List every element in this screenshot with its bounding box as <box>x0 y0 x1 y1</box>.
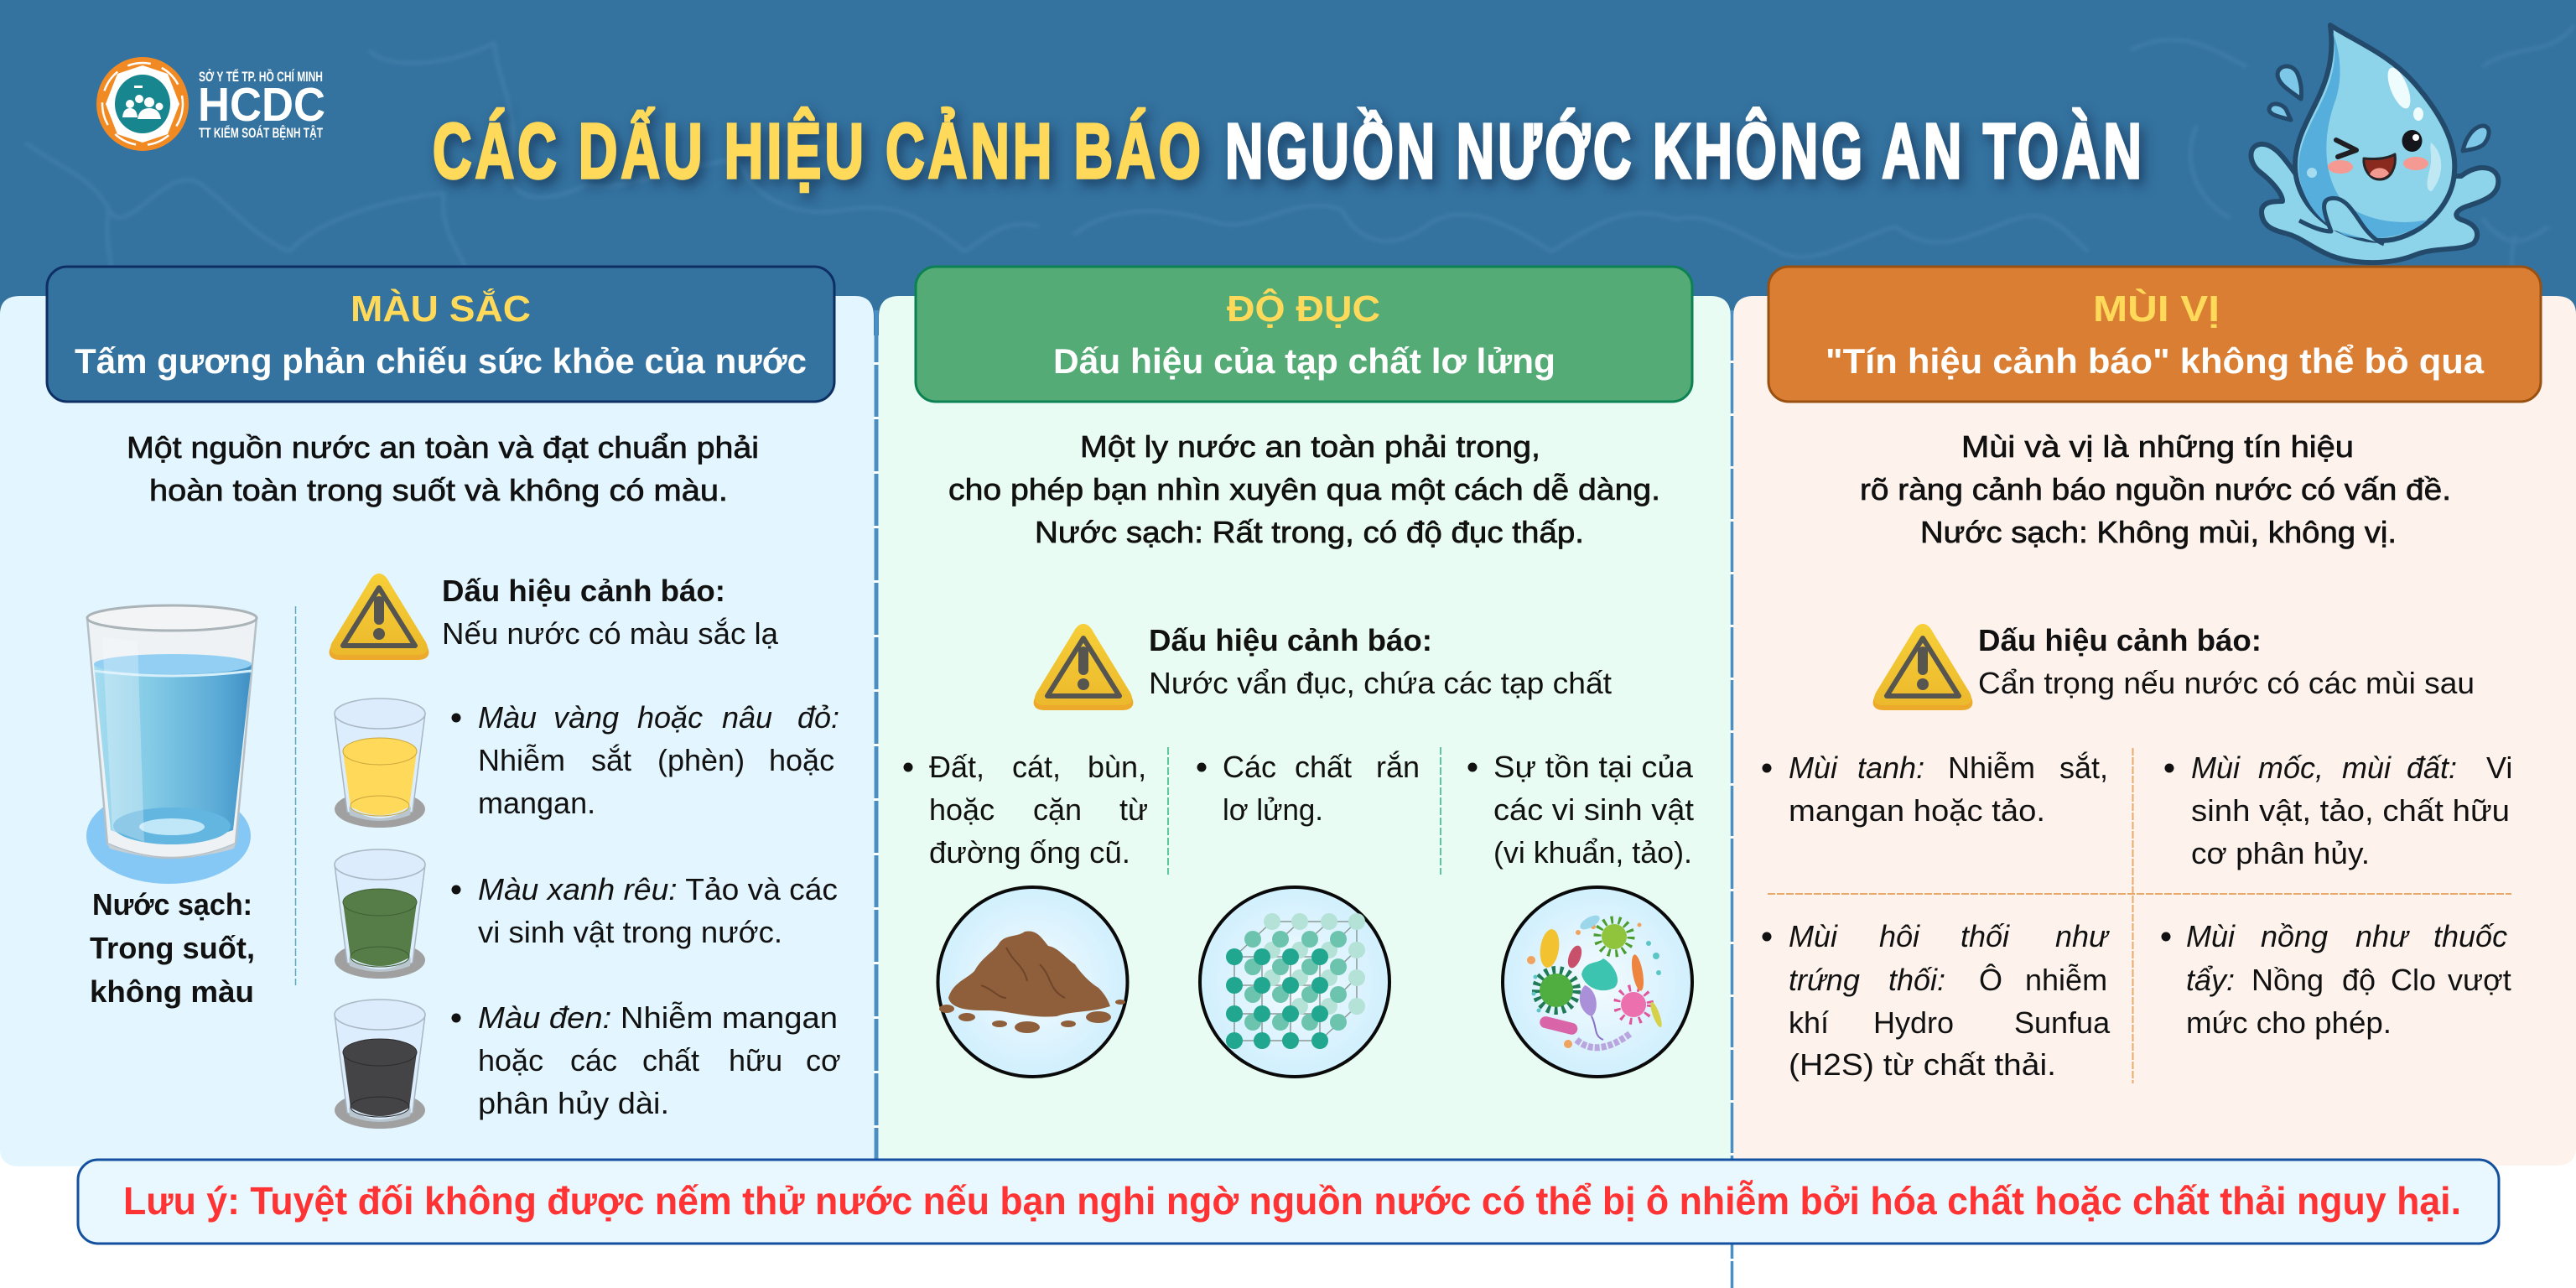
warning text <box>1149 623 1612 700</box>
heading: mùi vị: "Tín hiệu cảnh báo" không thể bỏ qua <box>1826 341 2485 381</box>
intro text <box>948 429 1660 549</box>
heading: mùi vị: MÙI VỊ <box>2093 288 2220 330</box>
bullet: rotten egg smell: như <box>2055 919 2110 953</box>
bullet: black: các <box>570 1043 617 1078</box>
bullet: yellow: (phèn) <box>657 743 745 777</box>
logo: HCDC: HCDC <box>198 78 325 132</box>
bullet: chlorine smell: tẩy: <box>2186 963 2235 997</box>
bullet: microorganisms <box>1467 750 1694 870</box>
icon: black water glass <box>335 1000 425 1129</box>
bullet: rotten egg smell: Hydro <box>1873 1005 1954 1040</box>
bullet: microorganisms: (vi khuẩn, tảo). <box>1493 835 1692 870</box>
bullet: yellow: đỏ: <box>797 700 839 735</box>
bullet: soil: Đất, <box>929 750 984 784</box>
bullet: musty smell: mùi <box>2342 750 2392 785</box>
caption: clean water: không màu <box>90 974 254 1009</box>
bullet: yellow: Nhiễm <box>478 743 565 777</box>
bullet: chlorine smell: thuốc <box>2433 919 2507 953</box>
bullet: black: cơ <box>806 1043 841 1078</box>
bullet: chlorine smell: vượt <box>2448 963 2511 997</box>
heading: mùi vị <box>1768 267 2541 402</box>
warning text: Dấu hiệu cảnh báo: <box>442 574 725 608</box>
heading: độ đục: Dấu hiệu của tạp chất lơ lửng <box>1053 341 1555 381</box>
highlights <box>2383 65 2415 112</box>
bullet: green <box>451 872 838 949</box>
intro text: cho phép bạn nhìn xuyên qua một cách dễ dàng. <box>948 472 1660 506</box>
icon: particle lattice <box>1200 887 1389 1077</box>
bullet: fishy smell: Mùi <box>1789 750 1838 785</box>
bullet: rotten egg smell: trứng <box>1789 963 1860 997</box>
icon: microorganisms <box>1503 887 1692 1077</box>
bullet: yellow: mangan. <box>478 786 595 820</box>
bullet: fishy smell: mangan hoặc tảo. <box>1789 793 2045 828</box>
divider: blue dashed lines <box>876 310 1732 1288</box>
bullet: black: hữu <box>729 1043 782 1078</box>
bullet: rotten egg smell: Mùi <box>1789 919 1838 953</box>
logo: HCDC: SỞ Y TẾ TP. HỒ CHÍ MINH <box>199 69 323 85</box>
intro text: hoàn toàn trong suốt và không có màu. <box>149 473 728 507</box>
bullet: yellow: hoặc <box>637 700 703 735</box>
bullet: musty smell: cơ phân hủy. <box>2191 836 2370 870</box>
bullet: suspended solids: chất <box>1295 750 1352 784</box>
bullet: soil <box>904 750 1148 870</box>
icon: yellow water glass <box>335 699 425 828</box>
bullet: musty smell <box>2165 750 2512 870</box>
bullet: rotten egg smell: (H2S) từ chất thải. <box>1789 1047 2056 1082</box>
heading: màu sắc: MÀU SẮC <box>351 288 531 330</box>
body <box>2295 25 2454 241</box>
bullet: musty smell: mốc, <box>2258 750 2324 785</box>
title: CÁC DẤU HIỆU CẢNH BÁO <box>433 107 1204 195</box>
bullet: soil: từ <box>1119 792 1148 827</box>
bullet: suspended solids: rắn <box>1376 750 1420 784</box>
bullet: yellow: Màu <box>478 700 537 735</box>
intro text: rõ ràng cảnh báo nguồn nước có vấn đề. <box>1860 472 2451 506</box>
bullet: soil: hoặc <box>929 792 995 827</box>
bullet: soil: đường ống cũ. <box>929 835 1130 870</box>
bullet: suspended solids <box>1197 750 1420 827</box>
panel: độ đục <box>904 267 1694 1077</box>
bullet: suspended solids: lơ lửng. <box>1223 792 1323 827</box>
bullet: chlorine smell: mức cho phép. <box>2186 1005 2392 1040</box>
bullet: yellow: hoặc <box>769 743 834 777</box>
heading: màu sắc <box>47 267 834 402</box>
bullet: fishy smell: sắt, <box>2059 750 2108 785</box>
bullet: black: Màu đen: Nhiễm mangan <box>478 1000 838 1035</box>
bullet: suspended solids: Các <box>1223 750 1276 784</box>
icon: warning <box>1873 624 1972 710</box>
wave <box>2299 198 2384 244</box>
warning text <box>442 574 779 651</box>
bullet: fishy smell: tanh: <box>1857 750 1924 785</box>
bullet: chlorine smell: nồng <box>2261 919 2328 953</box>
panel: màu sắc <box>47 267 841 1129</box>
warning text: Cẩn trọng nếu nước có các mùi sau <box>1978 666 2475 700</box>
logo: HCDC: TT KIỂM SOÁT BỆNH TẬT <box>199 125 323 141</box>
bullet: yellow: sắt <box>591 743 631 777</box>
bullet: chlorine smell: độ <box>2342 963 2376 997</box>
bullet: rotten egg smell: Sunfua <box>2014 1005 2111 1040</box>
illustration: clean water glass <box>86 605 257 884</box>
face <box>2336 140 2356 157</box>
bullet: green: Màu xanh rêu: Tảo và các <box>478 872 838 906</box>
bullet: musty smell: Vi <box>2486 750 2512 785</box>
bullet: rotten egg smell: thối: <box>1888 963 1945 997</box>
mascot: water droplet <box>2251 25 2498 262</box>
bullet: chlorine smell: Nồng <box>2251 963 2324 997</box>
logo: HCDC <box>96 57 325 151</box>
warning text <box>1978 623 2475 700</box>
bullet: rotten egg smell: khí <box>1789 1005 1829 1040</box>
callout: warning note <box>78 1160 2499 1244</box>
bullet: fishy smell <box>1763 750 2108 828</box>
panel: độ đục background <box>879 296 1731 1166</box>
bullet: chlorine smell: Mùi <box>2186 919 2236 953</box>
bullet: musty smell: sinh vật, tảo, chất hữu <box>2191 793 2510 828</box>
heading: độ đục: ĐỘ ĐỤC <box>1227 287 1380 330</box>
warning text: Dấu hiệu cảnh báo: <box>1978 623 2262 657</box>
bullet: musty smell: Mùi <box>2191 750 2241 785</box>
bullet: fishy smell: Nhiễm <box>1948 750 2035 785</box>
icon: green water glass <box>335 849 425 979</box>
warning text: Dấu hiệu cảnh báo: <box>1149 623 1432 657</box>
bullet: green: vi sinh vật trong nước. <box>478 915 782 949</box>
bullet: chlorine smell <box>2162 919 2511 1040</box>
bullet: rotten egg smell: thối <box>1961 919 2010 953</box>
bullet: rotten egg smell: hôi <box>1879 919 1920 953</box>
intro text <box>127 430 759 507</box>
splash <box>2251 144 2498 262</box>
bullet: yellow <box>451 700 839 820</box>
intro text <box>1860 429 2451 549</box>
bullet: chlorine smell: Clo <box>2391 963 2436 997</box>
intro text: Nước sạch: Rất trong, có độ đục thấp. <box>1035 515 1584 549</box>
bullet: rotten egg smell: Ô <box>1979 963 2002 997</box>
callout: warning note: Lưu ý: Tuyệt đối không được nếm thử nước nếu bạn nghi ngờ nguồn nước có thể bị ô nhiễm bởi hóa chất hoặc chất thải nguy hại. <box>123 1179 2461 1223</box>
bullet: microorganisms: các vi sinh vật <box>1493 792 1694 827</box>
small drops <box>2277 66 2302 99</box>
warning text: Nếu nước có màu sắc lạ <box>442 616 779 651</box>
caption: clean water: Nước sạch: <box>92 887 252 922</box>
bullet: musty smell: đất: <box>2407 750 2457 785</box>
intro text: Nước sạch: Không mùi, không vị. <box>1920 515 2397 549</box>
header background <box>0 0 2576 335</box>
panel: màu sắc background <box>0 296 874 1166</box>
bullet: soil: cặn <box>1033 792 1082 827</box>
bullet: microorganisms: Sự tồn tại của <box>1493 750 1694 784</box>
panel: mùi vị background <box>1733 296 2576 1166</box>
bullet: rotten egg smell <box>1763 919 2111 1082</box>
caption: clean water <box>90 887 255 1009</box>
bullet: rotten egg smell: nhiễm <box>2025 963 2107 997</box>
bullet: yellow: nâu <box>722 700 772 735</box>
bullet: black: chất <box>642 1043 699 1078</box>
bullet: soil: bùn, <box>1088 750 1146 784</box>
intro text: Một nguồn nước an toàn và đạt chuẩn phải <box>127 430 759 465</box>
heading: độ đục <box>916 267 1692 402</box>
bullet: chlorine smell: như <box>2355 919 2410 953</box>
intro text: Một ly nước an toàn phải trong, <box>1080 429 1540 464</box>
icon: soil pile <box>937 887 1127 1077</box>
title <box>433 107 2145 195</box>
warning text: Nước vẩn đục, chứa các tạp chất <box>1149 666 1612 700</box>
caption: clean water: Trong suốt, <box>90 931 255 965</box>
bullet: soil: cát, <box>1012 750 1061 784</box>
bullet: black: hoặc <box>478 1043 543 1078</box>
bullet: black <box>451 1000 841 1120</box>
icon: warning <box>1034 624 1133 710</box>
title: NGUỒN NƯỚC KHÔNG AN TOÀN <box>1225 107 2145 195</box>
panel: mùi vị <box>1763 267 2541 1083</box>
heading: màu sắc: Tấm gương phản chiếu sức khỏe của nước <box>75 341 807 381</box>
intro text: Mùi và vị là những tín hiệu <box>1961 429 2354 464</box>
bullet: yellow: vàng <box>553 700 619 735</box>
icon: warning <box>330 574 428 660</box>
bullet: black: phân hủy dài. <box>478 1086 669 1120</box>
